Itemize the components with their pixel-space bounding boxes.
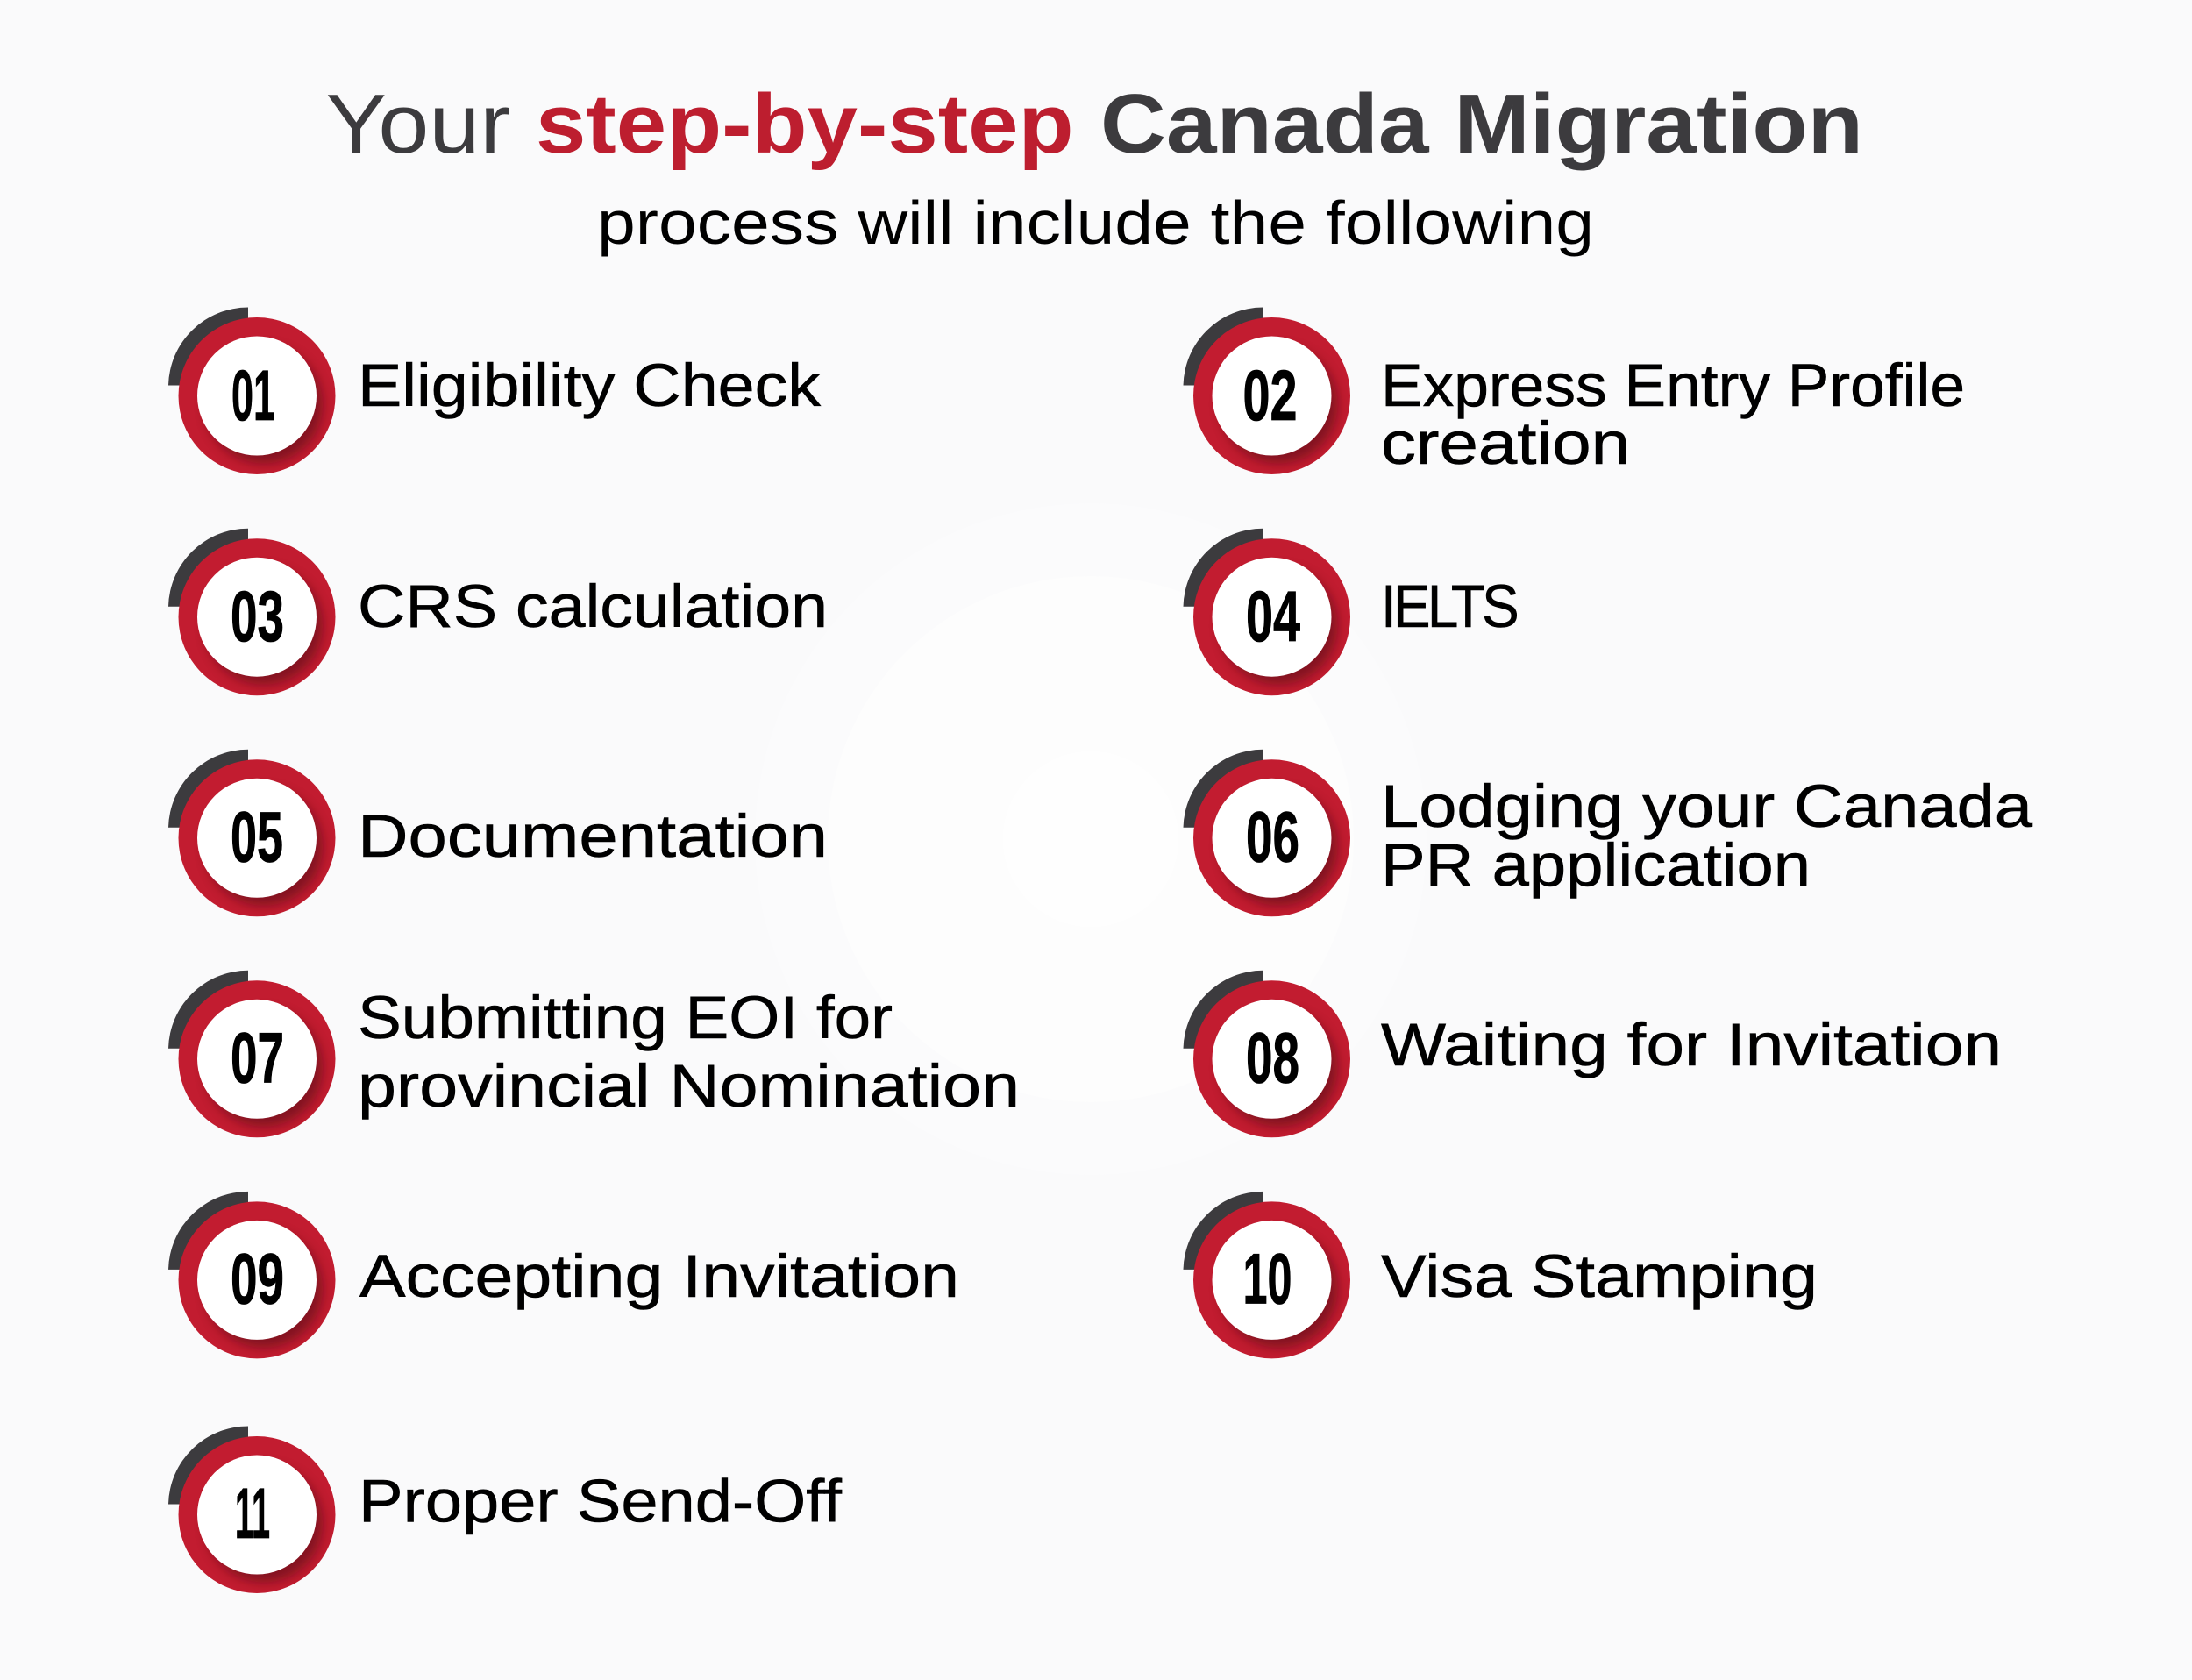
badge 01 [168, 307, 335, 474]
badge 04 [1184, 529, 1350, 695]
title: Your [326, 77, 510, 171]
label 06: Lodging your Canada [1381, 772, 2033, 840]
subtitle: process will include the following [597, 189, 1594, 257]
title: step-by-step [536, 77, 1073, 171]
badge 03 [168, 529, 335, 695]
badge 05: 05 [231, 797, 283, 877]
badge 11 [168, 1426, 335, 1593]
label 09: Accepting Invitation [359, 1242, 959, 1310]
badge 02: 02 [1243, 356, 1298, 436]
badge 10: 10 [1243, 1239, 1292, 1319]
label 01: Eligibility Check [358, 352, 822, 419]
step 08 [1184, 971, 2002, 1137]
title [326, 77, 1863, 171]
step 01 [168, 307, 822, 474]
step 02 [1184, 307, 1965, 477]
badge 07: 07 [231, 1018, 284, 1098]
badge 09: 09 [231, 1239, 284, 1319]
label 10: Visa Stamping [1381, 1242, 1818, 1310]
badge 06 [1184, 750, 1350, 916]
label 06: PR application [1381, 831, 1811, 899]
badge 02 [1184, 307, 1350, 474]
label 02 [1381, 352, 1965, 477]
step 10 [1184, 1192, 1818, 1358]
label 07 [358, 984, 1020, 1120]
title: Canada Migration [1100, 77, 1863, 171]
label 02: creation [1381, 409, 1630, 477]
badge 08: 08 [1246, 1018, 1299, 1098]
badge 05 [168, 750, 335, 916]
label 07: provincial Nomination [358, 1052, 1020, 1120]
step 05 [168, 750, 828, 916]
badge 03: 03 [231, 577, 284, 657]
badge 08 [1184, 971, 1350, 1137]
badge 01: 01 [231, 356, 275, 436]
badge 11: 11 [235, 1474, 270, 1554]
badge 09 [168, 1192, 335, 1358]
label 06 [1381, 772, 2033, 899]
step 06 [1184, 750, 2033, 916]
badge 06: 06 [1246, 797, 1299, 877]
step 03 [168, 529, 828, 695]
label 04: IELTS [1381, 573, 1517, 640]
step 09 [168, 1192, 959, 1358]
label 05: Documentation [358, 802, 828, 870]
label 08: Waiting for Invitation [1381, 1011, 2002, 1078]
badge 07 [168, 971, 335, 1137]
label 07: Submitting EOI for [358, 984, 893, 1051]
step 07 [168, 971, 1020, 1137]
label 02: Express Entry Profile [1381, 352, 1965, 419]
label 03: CRS calculation [358, 573, 828, 640]
badge 10 [1184, 1192, 1350, 1358]
step 04 [1184, 529, 1517, 695]
label 11: Proper Send-Off [359, 1468, 843, 1534]
badge 04: 04 [1246, 577, 1300, 657]
step 11 [168, 1426, 843, 1593]
